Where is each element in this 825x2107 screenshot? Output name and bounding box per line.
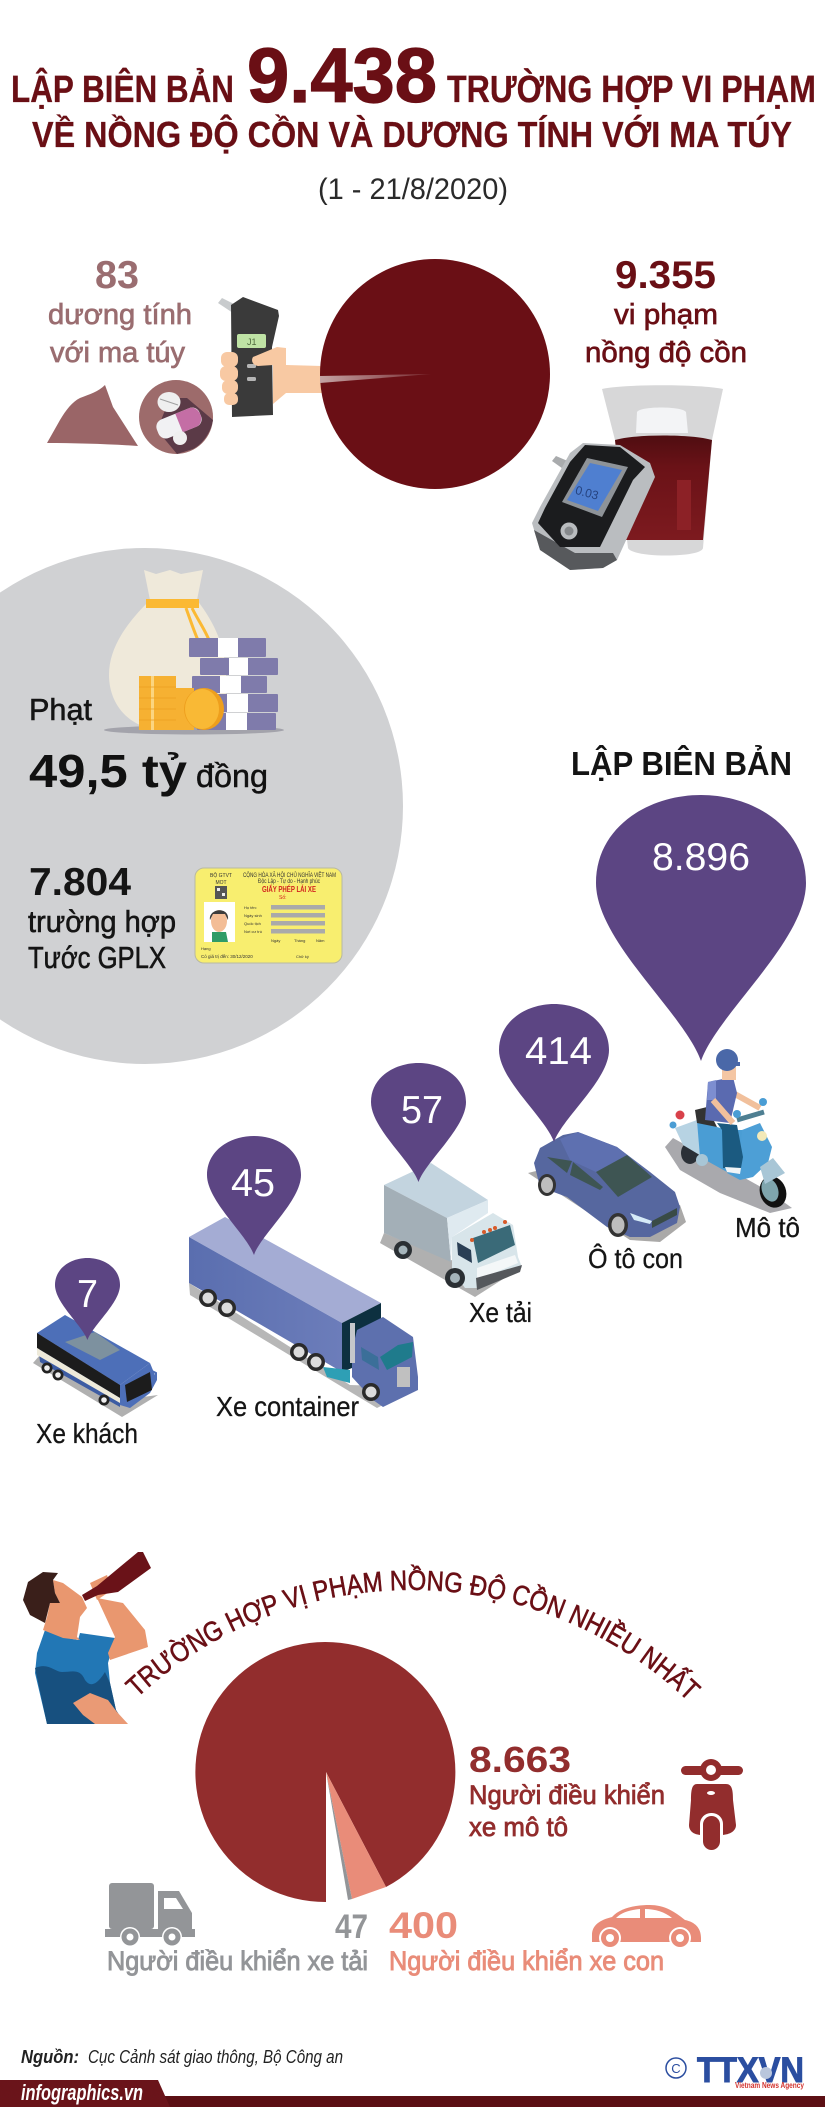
icon: driving licence card: Họ tên: (244, 905, 257, 910)
icon: driving licence card: Tháng (294, 938, 305, 943)
text: fine amount: 49,5 tỷ (29, 745, 187, 797)
icon: container truck (189, 1217, 418, 1408)
stat: 400 car drivers: 400 (389, 1905, 458, 1946)
pin: coach 7: 7 (77, 1273, 98, 1316)
text: fine label: Phạt (29, 692, 92, 727)
pie chart: violators by vehicle (195, 1642, 455, 1902)
pin: container 45: 45 (231, 1162, 275, 1205)
icon: money bag and stacks (104, 570, 284, 734)
footer band (0, 2080, 825, 2107)
icon: driving licence card: GIẤY PHÉP LÁI XE (262, 884, 317, 894)
stat: 83 drug positive: dương tính (48, 299, 192, 331)
logo: TTXVN: Vietnam News Agency (735, 2081, 804, 2090)
icon: driving licence card: Ngày sinh (244, 913, 262, 918)
icon: driving licence card: Số: (279, 895, 287, 901)
logo: TTXVN: C (671, 2061, 681, 2076)
icon: driving licence card: Độc Lập - Tự do - Hạnh phúc (258, 879, 320, 885)
icon: driving licence card: Có giá trị đến: 30/12/2020 (201, 954, 253, 959)
icon: scooter (681, 1759, 743, 1852)
icon: man drinking from bottle (23, 1552, 151, 1724)
stat: 8.663 motorbike riders: xe mô tô (469, 1812, 568, 1842)
icon: motorbike rider (665, 1049, 792, 1213)
pie chart: alcohol versus drugs (320, 259, 550, 489)
text: licences revoked: Tước GPLX (28, 940, 166, 975)
vehicle labels: Mô tô (735, 1212, 800, 1243)
stat: 8.663 motorbike riders: Người điều khiển (469, 1780, 665, 1810)
source note (21, 2047, 343, 2067)
icon: pills (139, 380, 213, 454)
stat: 8.663 motorbike riders (469, 1739, 665, 1842)
source note: Nguồn: (21, 2047, 79, 2067)
title (11, 33, 816, 155)
heading: records by vehicle: LẬP BIÊN BẢN (571, 745, 792, 782)
stat: 83 drug positive: 83 (95, 254, 139, 297)
icon: driving licence card (195, 868, 342, 963)
stat: 9.355 alcohol violations: vi phạm (614, 299, 718, 331)
icon: hand holding breathalyzer (218, 297, 322, 417)
pin: car 414: 414 (525, 1030, 592, 1073)
icon: driving licence card: MOT (215, 880, 227, 886)
pin: truck 57 (371, 1063, 466, 1182)
vehicle labels: Xe tải (469, 1297, 532, 1328)
icon: driving licence card: BỘ GTVT (210, 872, 232, 879)
text: licences revoked: trường hợp (28, 904, 176, 939)
stat: 400 car drivers (389, 1905, 664, 1976)
stat: 8.663 motorbike riders: 8.663 (469, 1739, 571, 1780)
icon: breath tester device (532, 443, 655, 570)
pin: motorbike 8.896 (596, 795, 806, 1061)
text: fine amount: đồng (196, 758, 268, 794)
pin: coach 7 (55, 1258, 120, 1340)
stat: 47 truck drivers (107, 1908, 368, 1976)
vehicle labels: Ô tô con (588, 1243, 683, 1274)
text: licences revoked: 7.804 (29, 861, 131, 904)
text: fine amount (29, 745, 268, 797)
stat: 9.355 alcohol violations: nồng độ cồn (585, 337, 747, 369)
footer band: infographics.vn (21, 2080, 143, 2105)
pin: car 414 (499, 1004, 609, 1142)
icon: coach bus (33, 1315, 158, 1417)
stat: 47 truck drivers: Người điều khiển xe tải (107, 1946, 368, 1976)
vehicle labels: Xe container (216, 1391, 359, 1422)
icon: salmon car (592, 1905, 701, 1949)
icon: hand holding breathalyzer: J1 (247, 337, 257, 347)
title: 9.438 (247, 33, 437, 119)
stat: 9.355 alcohol violations (585, 254, 747, 369)
icon: grey truck (105, 1883, 195, 1947)
icon: car (528, 1132, 686, 1242)
icon: box truck (380, 1163, 522, 1297)
stat: 400 car drivers: Người điều khiển xe con (389, 1946, 664, 1976)
panel: fines and licence circle (0, 548, 403, 1064)
stat: 83 drug positive (48, 254, 192, 369)
icon: breath tester device: 0.03 (574, 483, 600, 503)
date range: (1 - 21/8/2020) (318, 173, 508, 206)
icon: driving licence card: Hạng (201, 946, 211, 951)
icon: driving licence card: Nơi cư trú (244, 929, 262, 934)
stat: 9.355 alcohol violations: 9.355 (615, 254, 716, 297)
icon: driving licence card: Quốc tịch (244, 921, 261, 926)
icon: driving licence card: Ngày (271, 938, 280, 943)
title: LẬP BIÊN BẢN (11, 67, 234, 111)
vehicle labels: Xe khách (36, 1418, 138, 1449)
heading: curved most violations: TRƯỜNG HỢP VỊ PHẠM NỒNG ĐỘ CỒN NHIỀU NHẤT (124, 1564, 702, 1698)
icon: driving licence card: CỘNG HÒA XÃ HỘI CHỦ NGHĨA VIỆT NAM (243, 871, 336, 879)
stat: 83 drug positive: với ma túy (50, 337, 185, 369)
icon: driving licence card: Chữ ký (296, 954, 309, 959)
source note: Cục Cảnh sát giao thông, Bộ Công an (88, 2047, 343, 2067)
icon: driving licence card: Năm (316, 938, 325, 943)
vehicle labels (36, 1212, 800, 1449)
pin: container 45 (207, 1136, 301, 1255)
icon: glass of alcohol (602, 385, 723, 556)
text: licences revoked (28, 861, 176, 975)
pin: truck 57: 57 (401, 1089, 443, 1132)
logo: TTXVN: TTXVN (697, 2051, 804, 2090)
stat: 47 truck drivers: 47 (335, 1908, 368, 1946)
icon: powder mound (47, 385, 138, 446)
pin: motorbike 8.896: 8.896 (652, 836, 750, 879)
